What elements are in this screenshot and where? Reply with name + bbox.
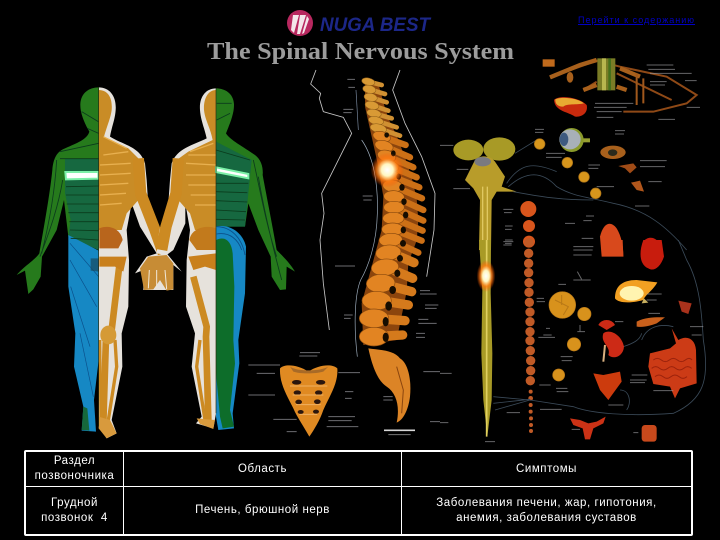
panel: spinal cord and organs xyxy=(440,58,706,442)
header: section xyxy=(35,455,114,482)
spleen and pancreas xyxy=(637,301,692,327)
vertebrae xyxy=(359,77,423,423)
header: section: Раздел xyxy=(54,455,95,467)
cell: vertebra: позвонок 4 xyxy=(41,512,108,524)
nerve curves xyxy=(507,140,687,250)
header: section: позвоночника xyxy=(35,470,114,482)
liver xyxy=(615,280,657,303)
nerve curves xyxy=(493,240,706,415)
bladder xyxy=(593,372,622,400)
brainstem xyxy=(453,137,517,250)
logo wordmark: NUGA BEST xyxy=(320,15,431,36)
spine small labels xyxy=(248,79,440,432)
tiny labels xyxy=(440,65,700,247)
title: The Spinal Nervous System xyxy=(207,39,514,65)
small organs xyxy=(600,146,662,260)
figure: spine side view xyxy=(248,70,440,437)
uterus xyxy=(570,417,606,439)
eye xyxy=(559,128,590,152)
back figure skeleton half xyxy=(157,88,216,429)
link: Перейти к содержанию xyxy=(578,15,695,25)
figure: front body dermatomes and skeleton xyxy=(17,87,182,438)
upper part: nerve cross-section and brainstem xyxy=(440,58,700,260)
header: area: Область xyxy=(238,462,287,474)
cell: vertebra: Грудной xyxy=(51,496,98,508)
lower organ xyxy=(642,425,657,442)
figure: back body dermatomes and skeleton xyxy=(99,87,295,430)
yellow ganglia xyxy=(534,139,601,199)
cell: symptoms: Заболевания печени, жар, гипотония, xyxy=(436,496,657,508)
table: symptoms xyxy=(24,450,693,536)
kidney and adrenal xyxy=(598,320,624,362)
glowing dermatome band xyxy=(216,167,248,178)
yellow glands xyxy=(549,292,591,381)
spine caption xyxy=(384,430,415,435)
sacrum side xyxy=(368,348,410,423)
orange ganglia xyxy=(520,201,536,248)
muscle section xyxy=(554,97,587,117)
logo: Nuga Best xyxy=(287,10,431,36)
front figure dermatome half xyxy=(17,87,99,432)
spinal cord glow xyxy=(477,260,495,292)
cell: symptoms xyxy=(436,496,657,524)
spine pain glow xyxy=(371,153,404,187)
header: symptoms: Симптомы xyxy=(516,462,577,474)
logo mark xyxy=(287,10,313,36)
glowing dermatome band xyxy=(65,172,98,179)
cell: vertebra xyxy=(41,496,108,524)
sacrum front view xyxy=(280,365,337,437)
tiny labels xyxy=(440,242,703,442)
lower part: spinal cord and organs xyxy=(440,238,706,442)
body outline xyxy=(311,70,435,357)
stomach and intestine xyxy=(648,328,697,398)
orange nerve root column xyxy=(524,238,535,433)
cell: area: Печень, брюшной нерв xyxy=(195,504,330,516)
front figure skeleton half xyxy=(91,87,182,438)
spinal nerve cross-section xyxy=(543,58,697,112)
lung and heart xyxy=(602,240,664,270)
cell: symptoms: анемия, заболевания суставов xyxy=(456,512,637,524)
back figure dermatome half xyxy=(216,88,295,430)
spinal cord xyxy=(479,240,492,437)
